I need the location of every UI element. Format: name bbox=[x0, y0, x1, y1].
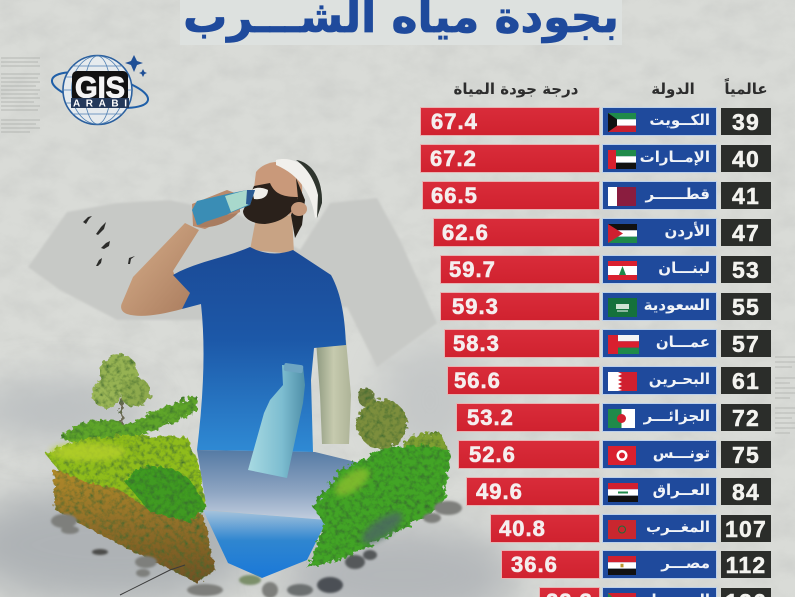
row: Kuwait: 39 bbox=[732, 109, 760, 135]
row: Iraq: 84 bbox=[732, 479, 760, 505]
row: Lebanon: 53 bbox=[732, 257, 760, 283]
logo: GIS Arabi: GIS bbox=[75, 72, 125, 104]
back arm bbox=[316, 340, 351, 444]
dark grass patch on left bbox=[125, 466, 207, 522]
row: Tunisia: 75 bbox=[732, 442, 760, 468]
beard bbox=[243, 183, 298, 224]
row: Saudi Arabia: 59.3 bbox=[452, 294, 499, 319]
row: Egypt: مصـــر bbox=[661, 554, 710, 572]
row: Oman: 57 bbox=[732, 331, 760, 357]
row: Tunisia bbox=[458, 440, 771, 469]
row: Morocco: 40.8 bbox=[499, 516, 546, 541]
row: Egypt: 112 bbox=[726, 552, 766, 578]
row: UAE bbox=[420, 144, 771, 173]
row: Kuwait: 67.4 bbox=[431, 109, 478, 134]
birds bbox=[83, 216, 135, 266]
newspaper texture left bbox=[1, 58, 40, 132]
row: Morocco bbox=[490, 514, 771, 543]
row: Oman: 58.3 bbox=[453, 331, 500, 356]
row: Qatar: قطــــــر bbox=[645, 185, 710, 203]
soft floor shading bbox=[0, 340, 520, 597]
left tree bbox=[92, 354, 150, 426]
row: Tunisia: تونـــس bbox=[653, 444, 710, 462]
island with grass, soil and water bbox=[45, 363, 462, 597]
row: Oman bbox=[444, 329, 771, 358]
row: UAE: الإمــارات bbox=[640, 148, 710, 166]
row: Kuwait: الكــويت bbox=[649, 111, 710, 129]
man drinking from bottle bbox=[121, 159, 351, 452]
row: Jordan: الأردن bbox=[665, 222, 710, 240]
ground crack bbox=[120, 565, 185, 595]
row: Oman: عمـــان bbox=[656, 333, 710, 351]
ear bbox=[291, 202, 307, 216]
row: Tunisia: 52.6 bbox=[469, 442, 516, 467]
rocks bbox=[51, 501, 462, 597]
row: Lebanon: 59.7 bbox=[449, 257, 496, 282]
logo: GIS Arabi: ARABI bbox=[73, 98, 127, 110]
row: Morocco: المغــرب bbox=[646, 518, 710, 536]
row: Morocco: 107 bbox=[725, 516, 767, 542]
map silhouette of the Arab world bbox=[28, 198, 437, 367]
neck bbox=[250, 215, 294, 254]
row: Lebanon bbox=[440, 255, 771, 284]
column heading: score: درجة جودة المياة bbox=[454, 80, 578, 98]
row: Bahrain bbox=[447, 366, 771, 395]
left grass bbox=[45, 435, 207, 520]
row: Iraq bbox=[466, 477, 771, 506]
row: Algeria: 53.2 bbox=[467, 405, 514, 430]
row: Sudan bbox=[539, 587, 771, 597]
row: Jordan bbox=[433, 218, 771, 247]
row: Saudi Arabia: السعودية bbox=[644, 296, 710, 314]
row: Saudi Arabia bbox=[440, 292, 771, 321]
open mouth bbox=[252, 188, 268, 199]
row: Egypt bbox=[501, 550, 771, 579]
row: Saudi Arabia: 55 bbox=[732, 294, 760, 320]
big plastic bottle bbox=[248, 363, 305, 478]
row: Algeria bbox=[456, 403, 771, 432]
fingers over bottle bbox=[197, 213, 238, 227]
row: Qatar: 66.5 bbox=[431, 183, 478, 208]
row: Egypt: 36.6 bbox=[511, 552, 558, 577]
left soil bbox=[53, 470, 215, 583]
row: Jordan: 47 bbox=[732, 220, 760, 246]
row: Algeria: الجزائـــر bbox=[644, 407, 710, 425]
row: Qatar: 41 bbox=[732, 183, 760, 209]
row: Iraq: العــراق bbox=[653, 481, 710, 499]
waterfall bbox=[203, 510, 327, 578]
head bbox=[254, 162, 302, 215]
hair bbox=[291, 178, 305, 238]
row: Algeria: 72 bbox=[732, 405, 760, 431]
raised arm bbox=[121, 223, 199, 316]
column heading: global rank: عالمياً bbox=[724, 80, 768, 98]
row: Bahrain: 61 bbox=[732, 368, 760, 394]
newspaper texture right bbox=[775, 357, 795, 433]
row: Kuwait bbox=[420, 107, 771, 136]
headband bbox=[276, 159, 322, 218]
row: Qatar bbox=[422, 181, 771, 210]
column heading: country: الدولة bbox=[651, 80, 695, 98]
row: Jordan: 62.6 bbox=[442, 220, 489, 245]
row: Iraq: 49.6 bbox=[476, 479, 523, 504]
row: Bahrain: البحـرين bbox=[649, 370, 710, 388]
row: UAE: 40 bbox=[732, 146, 760, 172]
back grass bbox=[60, 396, 197, 443]
row: Bahrain: 56.6 bbox=[454, 368, 501, 393]
row: UAE: 67.2 bbox=[430, 146, 477, 171]
row: Lebanon: لبنـــان bbox=[658, 259, 710, 277]
stone surface bbox=[197, 450, 360, 520]
drink bottle bbox=[192, 190, 255, 225]
shirt bbox=[173, 247, 346, 452]
right grass bbox=[307, 445, 451, 568]
logo: GIS Arabi bbox=[49, 55, 151, 124]
hand behind bottle bbox=[192, 190, 240, 229]
right bushes bbox=[357, 388, 375, 406]
